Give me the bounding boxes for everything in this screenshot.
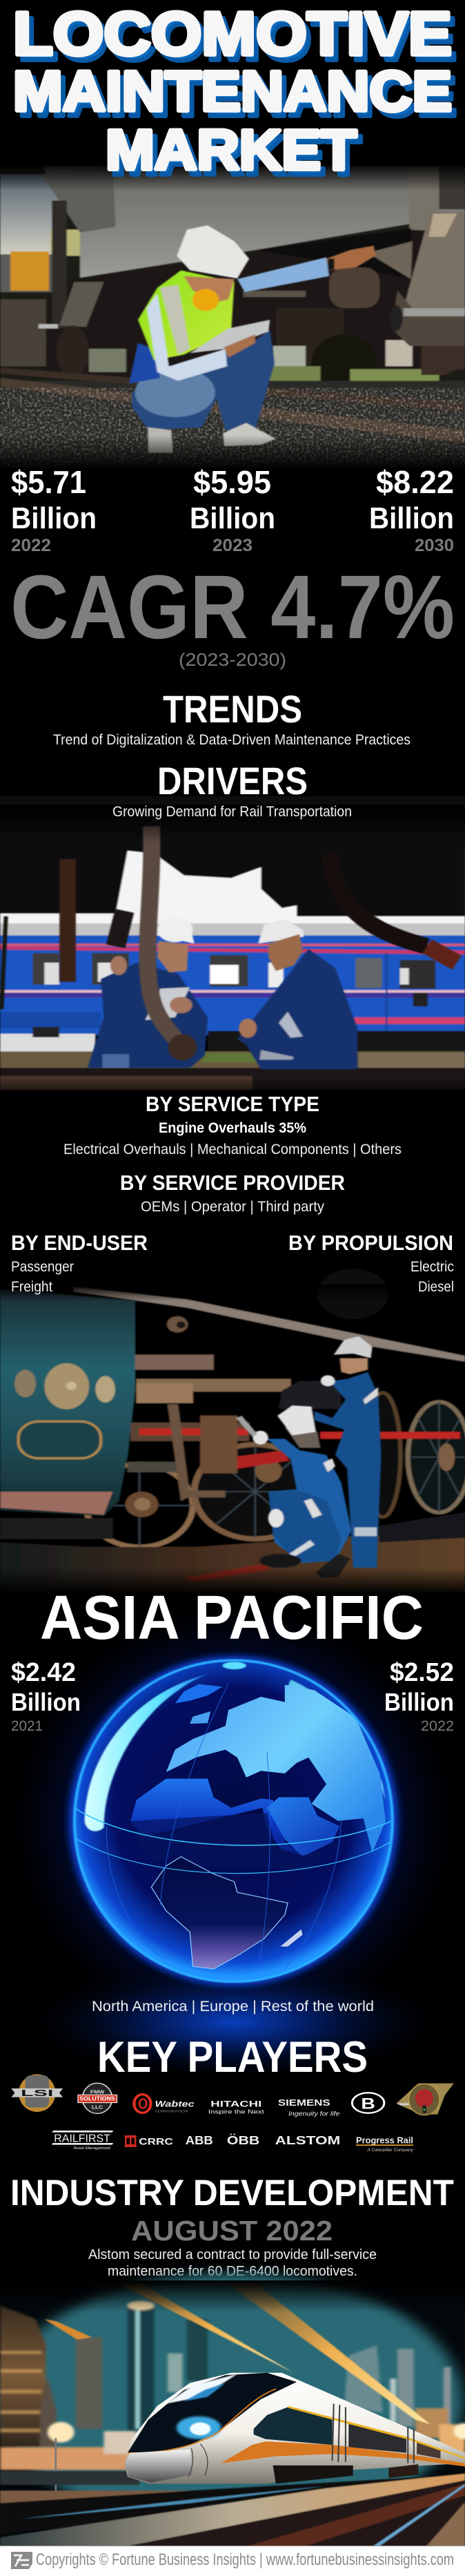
CAGR period: (2023-2030) [179,649,286,670]
title shadow [18,5,457,187]
segment: by propulsion: BY PROPULSION [288,1231,453,1255]
development description: maintenance for 60 DE-6400 locomotives. [108,2264,357,2279]
title shadow: MARKET [110,124,362,187]
segment: by propulsion [288,1231,454,1295]
logo: FMW Solutions: SOLUTIONS [79,2096,115,2102]
segment: by propulsion: Diesel [418,1279,454,1295]
train photo top fade [0,2280,465,2312]
segment: by service type: BY SERVICE TYPE [146,1092,319,1116]
stat 2023: Billion [190,501,275,535]
region value 2022: Billion [384,1688,454,1716]
region value 2022 [384,1658,454,1734]
logo: Railfirst: RAILFIRST [54,2133,110,2144]
logo: railway emblem [396,2084,454,2115]
tracks and platform [0,2471,465,2549]
logo: CRRC: CRRC [139,2137,173,2147]
locomotive photo fades [0,1285,465,1641]
stat 2022: Billion [11,501,97,535]
globe [2,1594,465,2083]
left engineer [88,918,208,1068]
logo: Progress Rail [356,2135,414,2153]
segment: by end-user [11,1231,148,1295]
big wheels [86,1393,465,1547]
heading: key players: KEY PLAYERS [97,2033,368,2082]
logo: Progress Rail: A Caterpillar Company [366,2147,414,2153]
logo: LSI: LSI [21,2088,53,2098]
stat 2023: 2023 [212,536,253,555]
teal firebox panel [0,1289,135,1516]
stat 2022 [11,464,97,555]
title face [13,0,452,182]
title shadow: LOCOMOTIVE [18,5,457,73]
hero fades [0,163,465,482]
stat 2030: Billion [369,501,454,535]
logo: Alstom: ALSTOM [275,2134,340,2147]
drivers: DRIVERS [157,759,308,802]
stat 2030: $8.22 [376,464,454,500]
light beams [44,2282,431,2424]
segment: by end-user: Freight [11,1279,52,1295]
standing engineer [315,1336,382,1568]
stat 2030 [369,464,454,555]
ballast texture [0,388,465,470]
stat 2022: $5.71 [11,464,86,500]
logo: CRRC [125,2135,173,2147]
logo: FMW Solutions [78,2083,117,2113]
stat 2030: 2030 [415,536,454,555]
segment: by service provider [120,1171,345,1215]
logo: Progress Rail: Progress Rail [356,2135,413,2146]
other regions: North America | Europe | Rest of the world [92,1999,374,2015]
train [125,2373,465,2483]
logo: Siemens [278,2099,339,2117]
trends: TRENDS [163,687,302,731]
title [13,0,457,187]
rods [137,1379,290,1392]
region value 2021: 2021 [11,1718,43,1734]
title face: MAINTENANCE [13,60,452,123]
logo: Wabtec: CORPORATION [155,2110,188,2113]
segment: by service type: Electrical Overhauls | Mechanical Components | Others [63,1142,402,1157]
foreground pipes [1,826,457,1061]
bright crescent [85,1674,208,1832]
logo: SNCB: B [361,2095,375,2113]
logo: Siemens: SIEMENS [278,2099,330,2108]
company logos [11,2074,454,2153]
logo: Wabtec: Wabtec [155,2099,195,2108]
logo: FMW Solutions: LLC [92,2104,103,2110]
right engineer [237,919,357,1069]
segment: by end-user: Passenger [11,1259,74,1275]
development date: AUGUST 2022 [131,2215,333,2247]
logo: Railfirst: Asset Management [74,2146,110,2151]
segment: by end-user: BY END-USER [11,1231,148,1255]
heading: Asia Pacific: ASIA PACIFIC [40,1584,424,1653]
logo: OBB: ÖBB [227,2133,259,2147]
drivers: Growing Demand for Rail Transportation [112,804,352,820]
trends: Trend of Digitalization & Data-Driven Maintenance Practices [53,732,410,748]
continents [175,1684,222,1703]
segment: by service type [63,1092,402,1157]
logo: LSI [11,2074,63,2112]
photo: steam locomotive maintenance [0,1269,465,1602]
logo: SNCB [352,2093,384,2113]
market size stats [11,464,454,555]
title face: MARKET [106,119,357,182]
logo: Wabtec [134,2095,195,2113]
drivers [112,759,352,820]
segment: by propulsion: Electric [410,1259,454,1275]
photo fades [0,805,465,1126]
logo: FMW Solutions: FMW [90,2088,104,2095]
photo: engineer inspecting wagon [0,166,465,471]
photo: high speed train at night [0,2274,465,2549]
segment: by service provider: OEMs | Operator | Third party [141,1199,324,1215]
development description [88,2247,377,2279]
footer bar [0,2546,465,2576]
region value 2022: 2022 [421,1718,454,1734]
development description: Alstom secured a contract to provide full-service [88,2247,377,2262]
logo: ABB: ABB [186,2134,213,2147]
logo: Hitachi: Inspire the Next [208,2109,264,2115]
photo: two engineers and blue train [0,796,465,1102]
footer logo [11,2552,32,2569]
region value 2022: $2.52 [390,1658,454,1687]
ground [0,1528,465,1602]
segment: by service type: Engine Overhauls 35% [159,1120,306,1136]
trends [53,687,410,748]
region value 2021 [11,1658,81,1734]
region value 2021: Billion [11,1688,81,1716]
logo: Hitachi [208,2099,264,2115]
stat 2023: $5.95 [193,464,271,500]
logo: Siemens: Ingenuity for life [288,2111,339,2117]
kneeling engineer [236,1405,352,1578]
skyline [0,2300,451,2447]
title face: LOCOMOTIVE [13,0,452,68]
stat 2023 [190,464,275,555]
stat 2022: 2022 [11,536,51,555]
city lights [0,2422,465,2470]
latitude and longitude lines [75,1684,392,1969]
segment: by service provider: BY SERVICE PROVIDER [120,1171,345,1195]
logo: Railfirst [52,2131,113,2151]
region value 2021: $2.42 [11,1658,76,1687]
title shadow: MAINTENANCE [18,66,457,128]
logo: Hitachi: HITACHI [210,2099,261,2108]
worker figure [129,225,375,453]
